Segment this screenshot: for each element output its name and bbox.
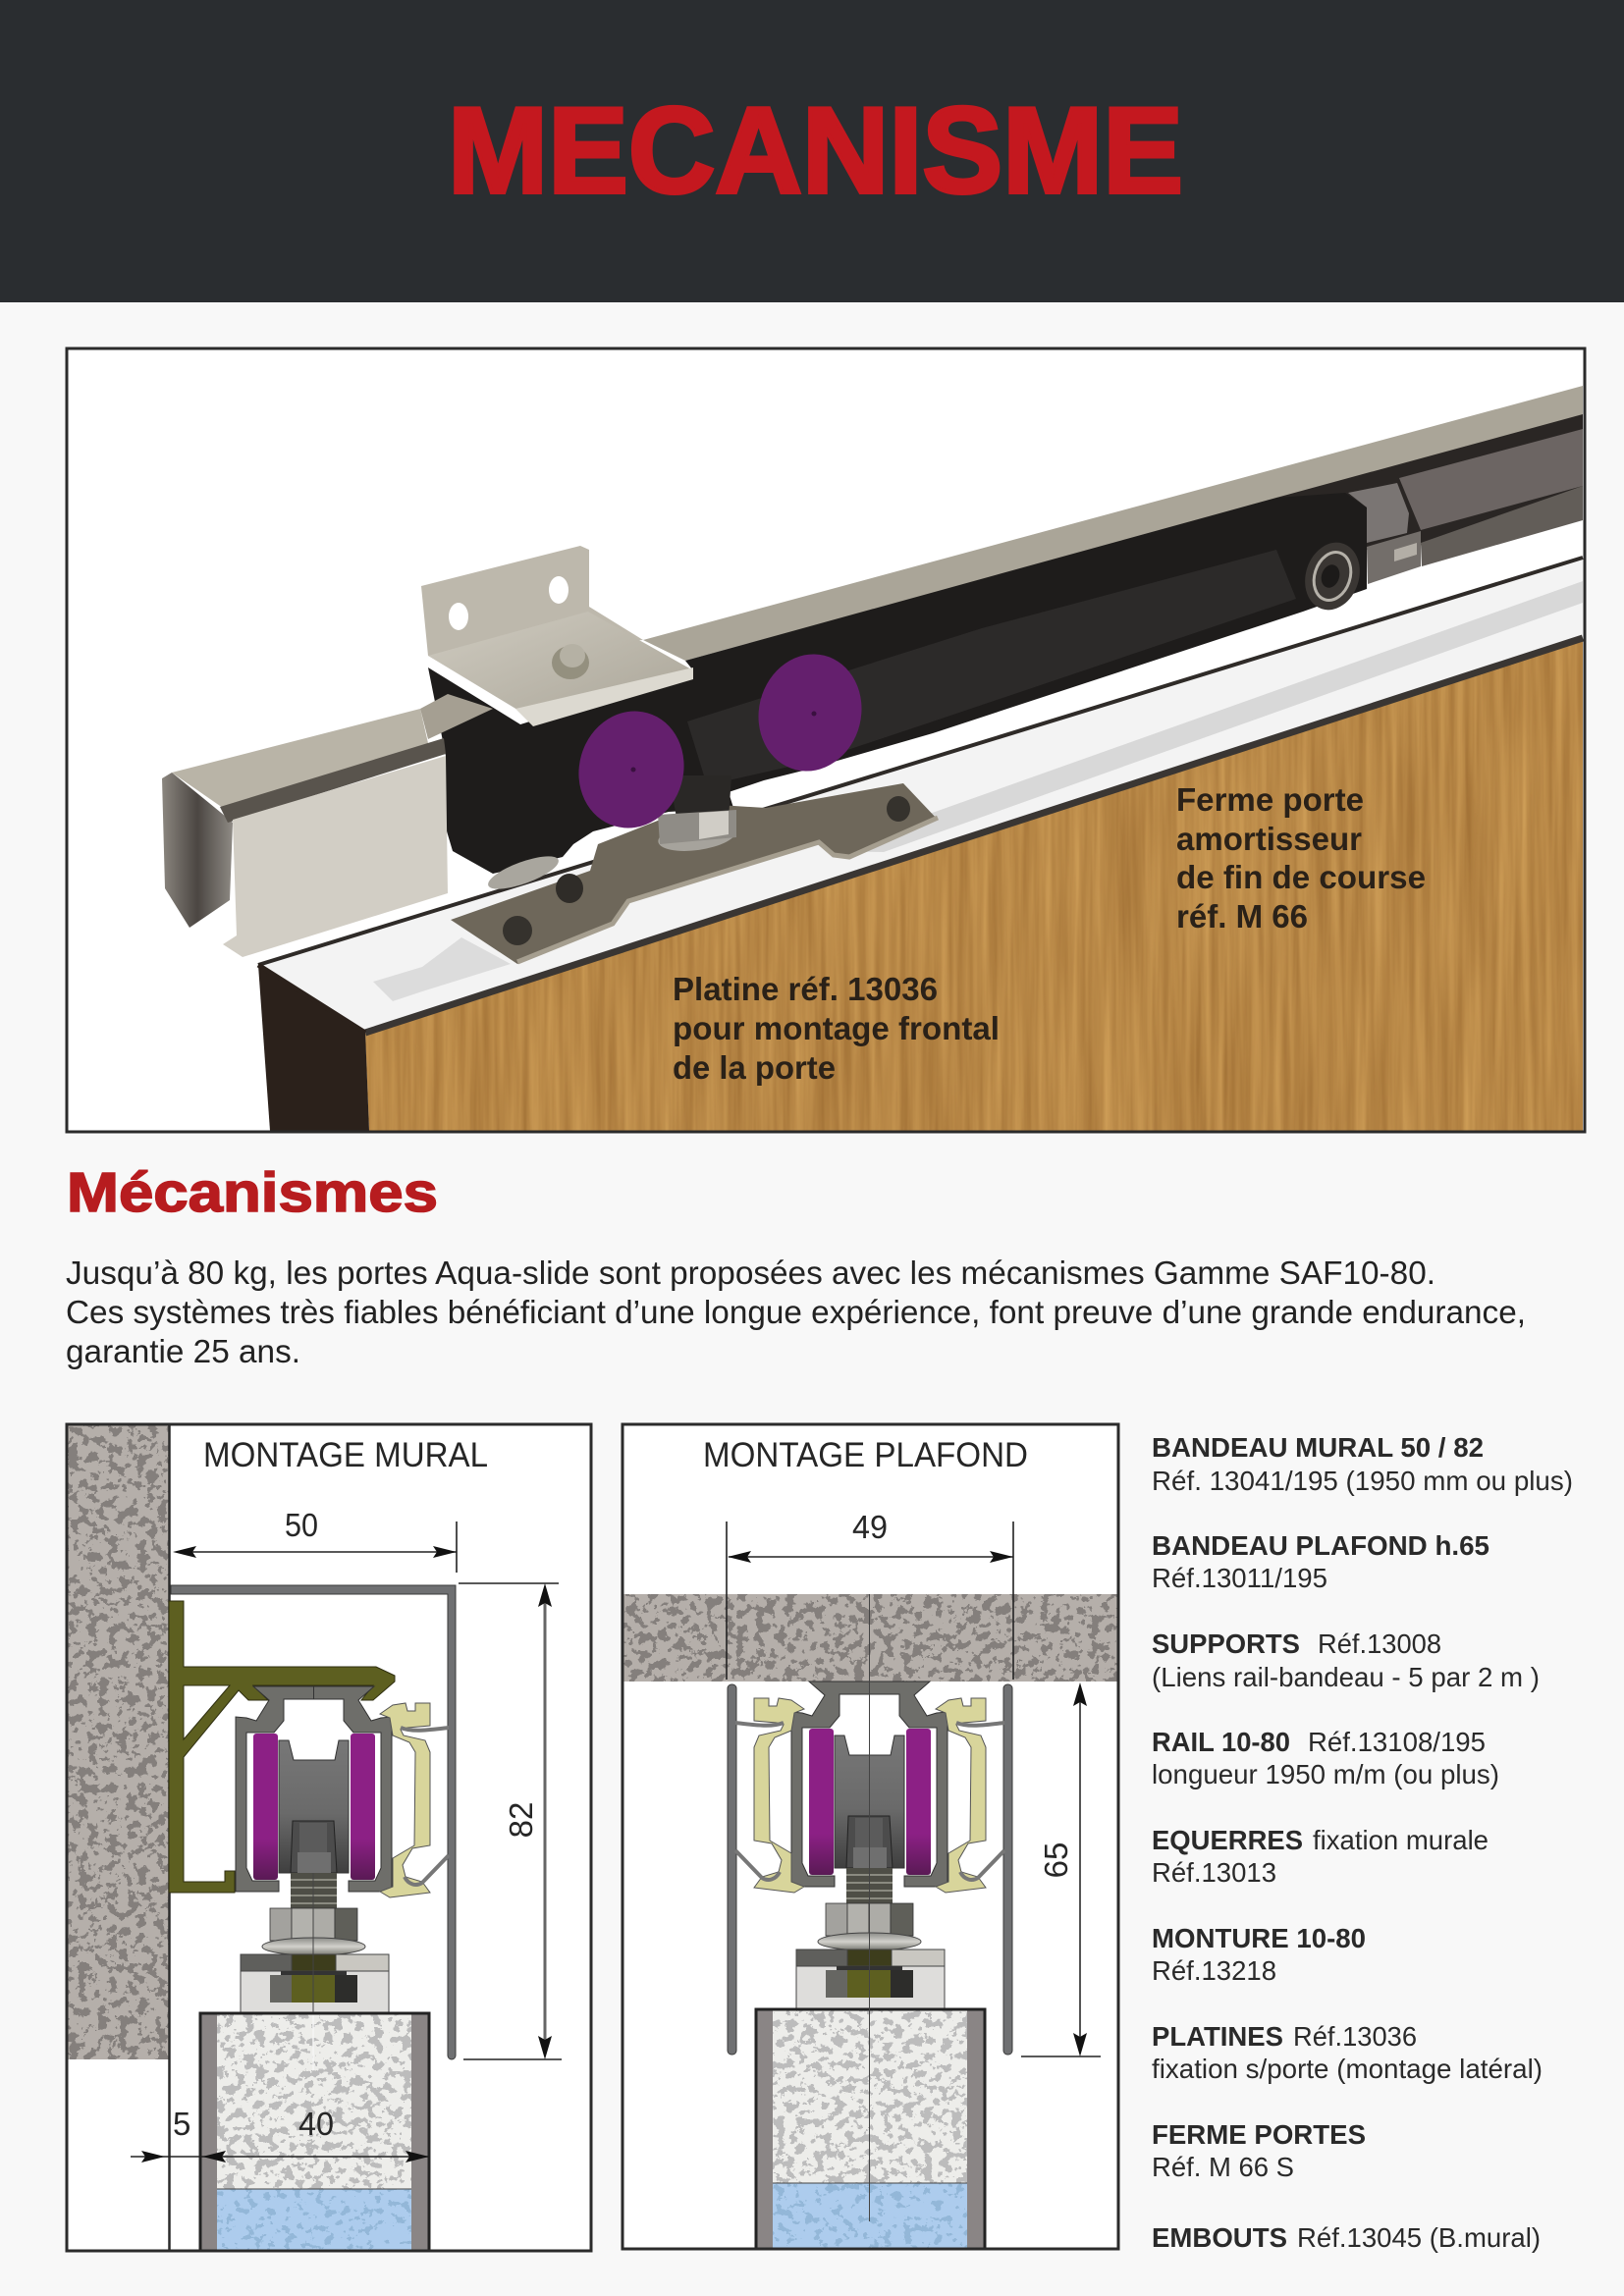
spring wires — [401, 1728, 449, 1885]
item: supports — [1152, 1629, 1540, 1692]
item: platines: Réf.13036 — [1293, 2021, 1417, 2052]
item: bandeau plafond: Réf.13011/195 — [1152, 1563, 1327, 1593]
item: supports: SUPPORTS — [1152, 1629, 1300, 1659]
item: ferme portes: Réf. M 66 S — [1152, 2152, 1294, 2182]
clip profile — [380, 1703, 449, 1897]
grey wheel core — [279, 1740, 349, 1873]
dimension 65: 65 — [1038, 1842, 1074, 1878]
item: bandeau mural — [1152, 1432, 1573, 1496]
label: platine: pour montage frontal — [673, 1010, 1000, 1046]
item: bandeau mural: Réf. 13041/195 (1950 mm ou plus) — [1152, 1466, 1573, 1496]
label: ferme porte: réf. M 66 — [1176, 898, 1308, 934]
item: rail: RAIL 10-80 — [1152, 1727, 1290, 1757]
door: white top strip — [258, 556, 1583, 1033]
item: monture — [1152, 1923, 1366, 1986]
front rail end — [162, 694, 493, 957]
header band — [0, 0, 1624, 302]
label: ferme porte: de fin de course — [1176, 859, 1426, 895]
door section — [756, 1594, 985, 2248]
washer — [262, 1938, 365, 1955]
item: equerres: fixation murale — [1313, 1825, 1489, 1855]
dimension 49 — [727, 1509, 1013, 1680]
mechanism — [791, 1682, 947, 2008]
dimension 5 and 40: 5 — [173, 2106, 190, 2142]
intro paragraph — [66, 1255, 1526, 1370]
left clip — [735, 1698, 804, 1893]
door section — [200, 1873, 429, 2250]
item: equerres: EQUERRES — [1152, 1825, 1303, 1855]
wall bracket olive — [169, 1601, 395, 1893]
item: rail — [1152, 1727, 1499, 1789]
yellow clip — [380, 1703, 430, 1897]
item: ferme portes: FERME PORTES — [1152, 2119, 1366, 2150]
fascia profiles — [728, 1684, 1012, 2055]
door: dark end grain — [258, 965, 369, 1131]
intro paragraph: Ces systèmes très fiables bénéficiant d’une longue expérience, font preuve d’une grande endurance, — [66, 1295, 1526, 1331]
label: platine: de la porte — [673, 1049, 836, 1086]
label: platine — [673, 971, 1000, 1086]
intro paragraph: Jusqu’à 80 kg, les portes Aqua-slide sont proposées avec les mécanismes Gamme SAF10-80. — [66, 1255, 1435, 1292]
item: supports: (Liens rail-bandeau - 5 par 2 m ) — [1152, 1662, 1540, 1692]
purple wheel left — [566, 699, 697, 840]
label: ferme porte: Ferme porte — [1176, 781, 1364, 818]
rail section — [236, 1686, 392, 1892]
ceiling — [623, 1594, 1117, 1682]
lower nut — [270, 1971, 357, 2002]
thread — [291, 1873, 337, 1908]
wall — [68, 1425, 169, 2059]
panel: product photo — [67, 348, 1585, 1132]
upper nut — [270, 1908, 357, 1941]
panel: montage mural — [67, 1424, 591, 2251]
purple wheel right — [746, 643, 874, 782]
damper tube — [1276, 414, 1583, 584]
end roller — [1297, 535, 1368, 617]
heading: MONTAGE PLAFOND — [703, 1436, 1028, 1474]
item: supports: Réf.13008 — [1318, 1629, 1441, 1659]
label: ferme porte: amortisseur — [1176, 821, 1362, 857]
heading: MONTAGE MURAL — [203, 1436, 488, 1474]
item: embouts: Réf.13045 (B.mural) — [1297, 2222, 1541, 2253]
black carriage body — [428, 493, 1367, 874]
item: ferme portes — [1152, 2119, 1366, 2182]
item: platines: PLATINES — [1152, 2021, 1283, 2052]
item: bandeau mural: BANDEAU MURAL 50 / 82 — [1152, 1432, 1484, 1463]
item: monture: Réf.13218 — [1152, 1955, 1276, 1986]
item: rail: Réf.13108/195 — [1308, 1727, 1486, 1757]
mechanism — [236, 1686, 392, 2013]
dimension 50 — [173, 1507, 457, 1573]
bolt head — [291, 1821, 337, 1873]
panel: montage plafond — [623, 1424, 1118, 2249]
section heading: Mécanismes — [67, 1161, 438, 1224]
dimension 82: 82 — [503, 1802, 539, 1838]
title: MECANISME — [448, 83, 1183, 219]
purple rollers — [253, 1734, 375, 1880]
right clip — [936, 1698, 1004, 1893]
item: embouts — [1152, 2222, 1541, 2253]
item: bandeau plafond: BANDEAU PLAFOND h.65 — [1152, 1530, 1489, 1561]
label: platine: Platine réf. 13036 — [673, 971, 938, 1007]
platine plate — [451, 783, 938, 964]
wall bracket — [421, 546, 693, 726]
item: bandeau plafond — [1152, 1530, 1489, 1593]
hanger bolt and nut — [656, 775, 738, 855]
intro paragraph: garantie 25 ans. — [66, 1334, 300, 1370]
mounting plate — [241, 1954, 389, 2013]
top rail beam — [643, 386, 1583, 661]
item: equerres: Réf.13013 — [1152, 1857, 1276, 1888]
item: embouts: EMBOUTS — [1152, 2222, 1287, 2253]
dimension 50: 50 — [285, 1507, 318, 1543]
dimension 82 — [459, 1583, 562, 2059]
dimension 65 — [1021, 1682, 1101, 2056]
item: monture: MONTURE 10-80 — [1152, 1923, 1366, 1953]
item: platines: fixation s/porte (montage latéral) — [1152, 2054, 1543, 2084]
parts list — [1152, 1432, 1573, 2253]
item: platines — [1152, 2021, 1543, 2084]
item: rail: longueur 1950 m/m (ou plus) — [1152, 1759, 1499, 1789]
door: wood face — [365, 640, 1583, 1131]
dimension 5 and 40 — [131, 2106, 429, 2163]
dimension 5 and 40: 40 — [298, 2106, 334, 2142]
steel foot — [485, 850, 562, 895]
dimension 49: 49 — [852, 1509, 888, 1545]
item: equerres — [1152, 1825, 1489, 1888]
fascia profile — [171, 1585, 456, 2059]
rail top flange — [812, 1682, 928, 1694]
label: ferme porte — [1176, 781, 1426, 934]
